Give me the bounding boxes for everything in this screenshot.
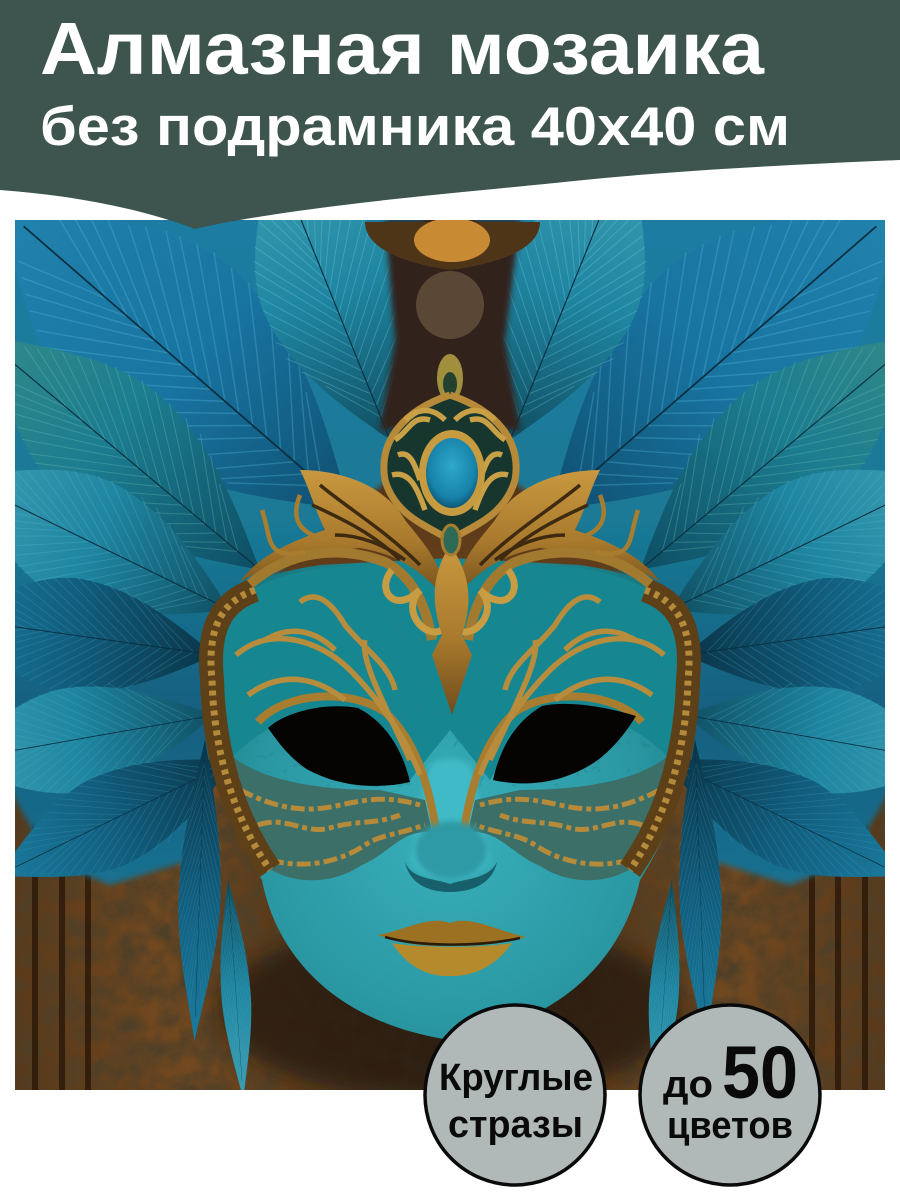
side feather	[0, 419, 258, 667]
forehead gem	[419, 430, 485, 516]
cheek lace scrolls	[240, 790, 425, 864]
gem rim	[419, 430, 485, 516]
feather backing mass	[10, 215, 425, 885]
lower side feather	[0, 663, 224, 815]
header banner	[0, 0, 900, 229]
ornament base	[365, 222, 540, 270]
upper side feather	[0, 281, 305, 623]
backdrop texture	[15, 785, 885, 1090]
right feathers	[472, 220, 885, 1049]
crown tendril	[262, 495, 330, 554]
badge circle	[640, 1005, 820, 1185]
mask face	[233, 558, 666, 1039]
bottom side feather	[0, 718, 255, 918]
carved frame right	[812, 800, 865, 1090]
central pendant	[432, 545, 472, 715]
gem frame side	[384, 395, 450, 540]
subtitle: без подрамника 40x40 см	[40, 95, 790, 157]
top outer feather	[0, 123, 419, 589]
top inner feather	[207, 121, 454, 466]
badge number: 50	[722, 1031, 798, 1114]
dark chin shadow	[212, 939, 688, 1090]
gem setting	[437, 354, 463, 395]
crown leaf	[240, 470, 448, 600]
gold lips	[378, 921, 526, 976]
top gold ornament	[365, 218, 540, 339]
ornament center	[414, 218, 490, 262]
cheek lace panel	[225, 750, 432, 880]
forehead darker teal	[215, 560, 685, 780]
top center dark plume	[380, 220, 520, 430]
top drop gem	[437, 354, 463, 395]
gem frame curls	[392, 411, 445, 510]
bronze backdrop	[15, 220, 885, 1090]
small gem	[442, 525, 460, 555]
artwork: venetian mask	[15, 220, 885, 1090]
badge circle	[425, 1005, 605, 1185]
badge: up to 50 colours	[640, 1005, 820, 1185]
gem stone	[426, 438, 478, 508]
carved frame left	[35, 800, 88, 1090]
badge prefix: до	[663, 1064, 713, 1106]
hanging feather outer	[174, 739, 226, 1041]
nose tip	[415, 821, 487, 879]
upper lip	[378, 921, 526, 946]
badge text line 2: стразы	[448, 1104, 583, 1146]
forehead crack texture	[256, 638, 648, 790]
left eye hole	[268, 706, 410, 786]
nose bridge highlight	[410, 759, 490, 879]
nose	[405, 821, 497, 892]
half mask gold mirrored	[450, 395, 689, 880]
eye rim gold	[258, 696, 437, 835]
title: Алмазная мозаика	[40, 7, 765, 90]
lower lip	[392, 943, 512, 976]
bronze boss	[416, 271, 484, 339]
mid side feather	[0, 561, 223, 711]
crown scroll arm	[250, 553, 432, 640]
hanging feather inner	[213, 879, 258, 1100]
badge text line 1: Круглые	[439, 1057, 593, 1099]
outer gold highlight	[211, 590, 270, 870]
lip shadow	[385, 937, 520, 945]
half mask gold work	[211, 395, 450, 880]
forehead scrolls	[236, 597, 420, 775]
nose shadow	[405, 862, 497, 892]
left feathers	[0, 121, 454, 1100]
crown curl	[386, 570, 442, 632]
badge text line 2: цветов	[667, 1105, 793, 1147]
gem center	[443, 372, 457, 396]
outer gold edge	[211, 590, 270, 870]
crown leaf veins	[312, 485, 420, 565]
right eye hole	[493, 704, 636, 783]
badge: round rhinestones	[425, 1005, 605, 1185]
